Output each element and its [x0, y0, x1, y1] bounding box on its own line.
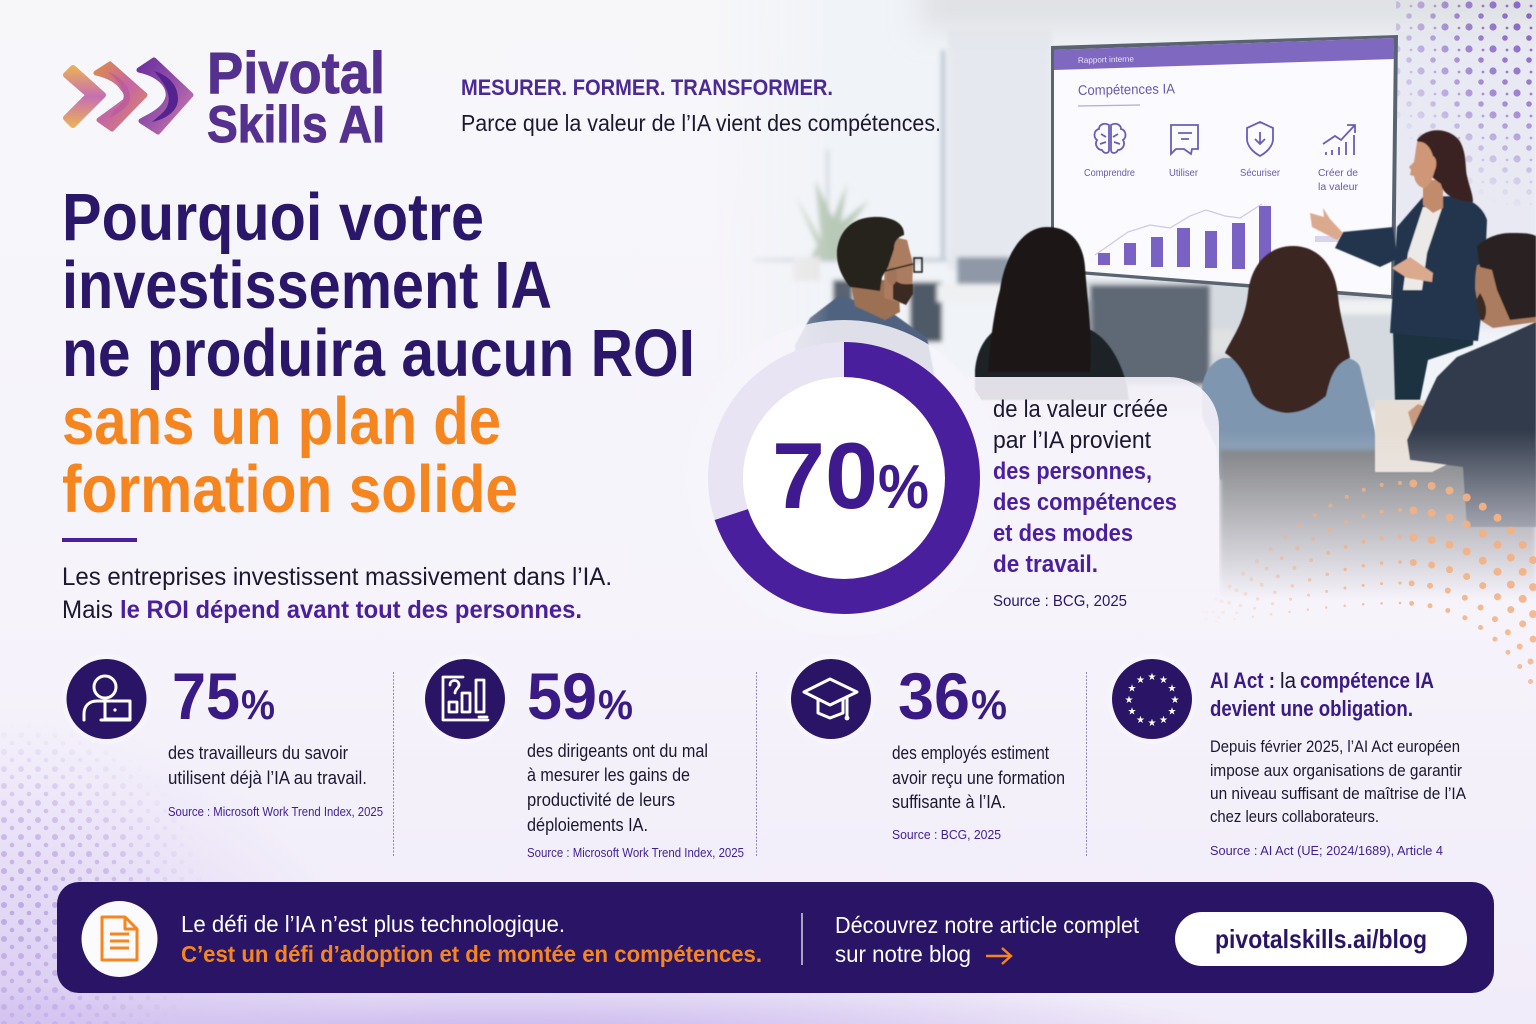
donut chart: 70 percent: %: [878, 453, 929, 522]
logo wordmark: Skills AI: [207, 96, 385, 154]
icon: person with laptop: [62, 654, 152, 744]
description: [168, 742, 367, 788]
icon: EU stars: ★: [1168, 706, 1177, 718]
display screen: Compétences IA: [1078, 80, 1176, 98]
display screen: [1051, 35, 1398, 299]
intro text: le ROI dépend avant tout des personnes.: [120, 596, 582, 624]
icon: EU stars: ★: [1128, 706, 1137, 718]
body: un niveau suffisant de maîtrise de l’IA: [1210, 785, 1466, 803]
description: [527, 740, 708, 835]
icon: shield: [1247, 122, 1273, 156]
icon: document: [82, 901, 158, 977]
icon: EU stars: ★: [1159, 675, 1168, 686]
banner message: Le défi de l’IA n’est plus technologique.: [181, 911, 565, 937]
icon: EU stars: ★: [1125, 695, 1134, 706]
heading: AI Act :: [1210, 668, 1275, 693]
description: [892, 742, 1065, 812]
main title: ne produira aucun ROI: [62, 316, 695, 391]
stat: 36 percent: [786, 654, 1065, 842]
heading: compétence IA: [1300, 668, 1434, 693]
donut chart: 70 percent: [686, 320, 1002, 636]
callout text: 70 percent: des compétences: [993, 489, 1177, 516]
intro text: Les entreprises investissent massivement dans l’IA.: [62, 563, 612, 591]
callout text: 70 percent: de la valeur créée: [993, 396, 1168, 423]
heading: [1210, 668, 1434, 721]
icon: chat: [1171, 125, 1198, 154]
table and floor: [1219, 448, 1536, 588]
donut chart: 70 percent: 70: [772, 423, 878, 528]
screen labels: la valeur: [1318, 182, 1359, 193]
person: audience woman brown hair: [1202, 246, 1380, 480]
icon: EU stars: ★: [1159, 715, 1168, 726]
blog invitation: Découvrez notre article complet: [835, 912, 1140, 938]
block: AI Act: [1107, 654, 1466, 858]
icon: EU stars: ★: [1136, 715, 1145, 726]
icon: EU stars: ★: [1148, 718, 1157, 729]
main title: sans un plan de: [62, 384, 501, 459]
blog invitation: [835, 912, 1140, 967]
description: productivité de leurs: [527, 789, 675, 810]
icon: growth chart: [1323, 125, 1355, 155]
room background: [754, 32, 1536, 414]
screen labels: [1084, 168, 1358, 190]
screen labels: Utiliser: [1169, 168, 1199, 179]
icon: graduation cap: [786, 654, 876, 744]
decorative orange dot arcs: [1213, 480, 1536, 684]
main title: formation solide: [62, 452, 518, 527]
description: suffisante à l’IA.: [892, 791, 1006, 812]
stat: 59 percent: Source : Microsoft Work Trend Index, 2025: [527, 845, 744, 860]
stat: 75 percent: [62, 654, 383, 819]
body: [1210, 738, 1466, 826]
description: déploiements IA.: [527, 814, 648, 835]
description: des travailleurs du savoir: [168, 742, 348, 763]
callout text: 70 percent: de travail.: [993, 551, 1098, 578]
figure: %: [971, 681, 1007, 728]
figure: %: [241, 681, 275, 728]
callout text: 70 percent: des personnes,: [993, 458, 1152, 485]
figure: [527, 659, 633, 733]
person: audience man right: [1375, 233, 1536, 527]
figure: %: [598, 681, 633, 728]
icon: chart with question mark: [420, 654, 510, 744]
icon: EU stars: ★: [1171, 695, 1180, 706]
body: Depuis février 2025, l’AI Act européen: [1210, 738, 1460, 756]
body: chez leurs collaborateurs.: [1210, 808, 1379, 826]
icon: EU stars: ★: [1148, 672, 1157, 683]
stat: 59 percent: [420, 654, 744, 860]
description: avoir reçu une formation: [892, 767, 1065, 788]
screen labels: Créer de: [1318, 168, 1358, 179]
icon: logo chevrons: [66, 60, 191, 132]
callout text: 70 percent: par l’IA provient: [993, 427, 1151, 454]
block: AI Act: Source : AI Act (UE; 2024/1689), Article 4: [1210, 843, 1443, 858]
description: des employés estiment: [892, 742, 1049, 763]
icon: EU stars: ★: [1136, 675, 1145, 686]
screen bar chart: [1095, 204, 1355, 270]
callout text: 70 percent: et des modes: [993, 520, 1133, 547]
callout text: 70 percent: [993, 396, 1177, 610]
logo wordmark: [207, 41, 385, 154]
person: audience man left: [795, 217, 937, 388]
photo: presenter and audience in meeting room: [754, 0, 1536, 590]
main title: investissement IA: [62, 248, 552, 323]
panel: 70 percent callout background: [960, 377, 1219, 640]
banner message: [181, 911, 762, 967]
main title: [62, 180, 695, 527]
person: presenter: [1310, 130, 1487, 400]
button: blog url: [1175, 912, 1467, 966]
figure: 59: [527, 659, 597, 733]
heading: la: [1280, 668, 1297, 693]
intro text: Mais: [62, 596, 113, 624]
banner message: C’est un défi d’adoption et de montée en compétences.: [181, 941, 762, 967]
decorative dots bottom left: [1, 741, 184, 1024]
screen labels: Sécuriser: [1240, 168, 1281, 179]
person: audience woman dark hair: [975, 227, 1129, 400]
icon: EU stars: ★: [1128, 684, 1137, 694]
stat: 75 percent: Source : Microsoft Work Trend Index, 2025: [168, 804, 383, 819]
icon: EU stars: ★: [1168, 684, 1177, 694]
stat: 36 percent: Source : BCG, 2025: [892, 827, 1001, 842]
arrow: [986, 948, 1011, 964]
figure: 36: [898, 659, 970, 733]
description: à mesurer les gains de: [527, 764, 690, 785]
button: blog url: pivotalskills.ai/blog: [1215, 924, 1427, 954]
callout text: 70 percent: Source : BCG, 2025: [993, 593, 1127, 610]
tagline: Parce que la valeur de l’IA vient des compétences.: [461, 110, 941, 136]
tagline: [461, 75, 941, 136]
figure: 75: [172, 659, 240, 733]
logo: [66, 41, 385, 154]
heading: devient une obligation.: [1210, 696, 1413, 721]
ceiling shadow: [920, 0, 1536, 30]
banner: call to action: [57, 882, 1494, 993]
description: des dirigeants ont du mal: [527, 740, 708, 761]
body: impose aux organisations de garantir: [1210, 762, 1462, 780]
description: utilisent déjà l’IA au travail.: [168, 767, 367, 788]
screen labels: Comprendre: [1084, 168, 1135, 179]
display screen: Rapport interne: [1078, 54, 1135, 65]
main title: Pourquoi votre: [62, 180, 484, 255]
icon: EU stars: [1107, 654, 1197, 744]
figure: [898, 659, 1007, 733]
icon: brain: [1095, 124, 1125, 153]
blog invitation: sur notre blog: [835, 941, 971, 967]
intro text: [62, 563, 612, 624]
decorative dots top right: [1396, 1, 1532, 204]
logo wordmark: Pivotal: [207, 41, 385, 106]
tagline: MESURER. FORMER. TRANSFORMER.: [461, 75, 833, 100]
